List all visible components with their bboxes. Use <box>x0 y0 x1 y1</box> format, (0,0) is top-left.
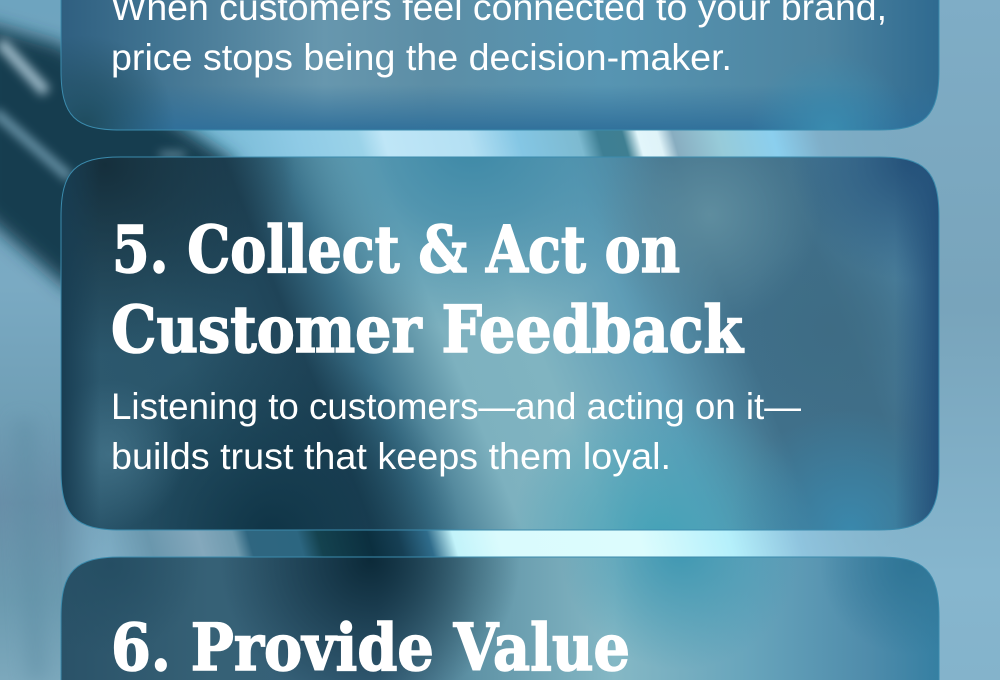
card 5 heading: 5. Collect & Act on <box>112 212 680 288</box>
panel: card 6 (partial) <box>61 557 939 680</box>
panel: card 4 (partial) <box>61 0 939 130</box>
card 5 body text: Listening to customers—and acting on it— <box>111 386 801 427</box>
card 4 body text: price stops being the decision-maker. <box>111 37 732 78</box>
card 5 body text: builds trust that keeps them loyal. <box>111 436 671 477</box>
card 5 body text <box>111 386 801 477</box>
card 4 body text <box>111 0 887 78</box>
card 5 heading <box>111 212 745 368</box>
panel: card 5 <box>61 157 939 530</box>
card 5 heading: Customer Feedback <box>111 292 745 368</box>
